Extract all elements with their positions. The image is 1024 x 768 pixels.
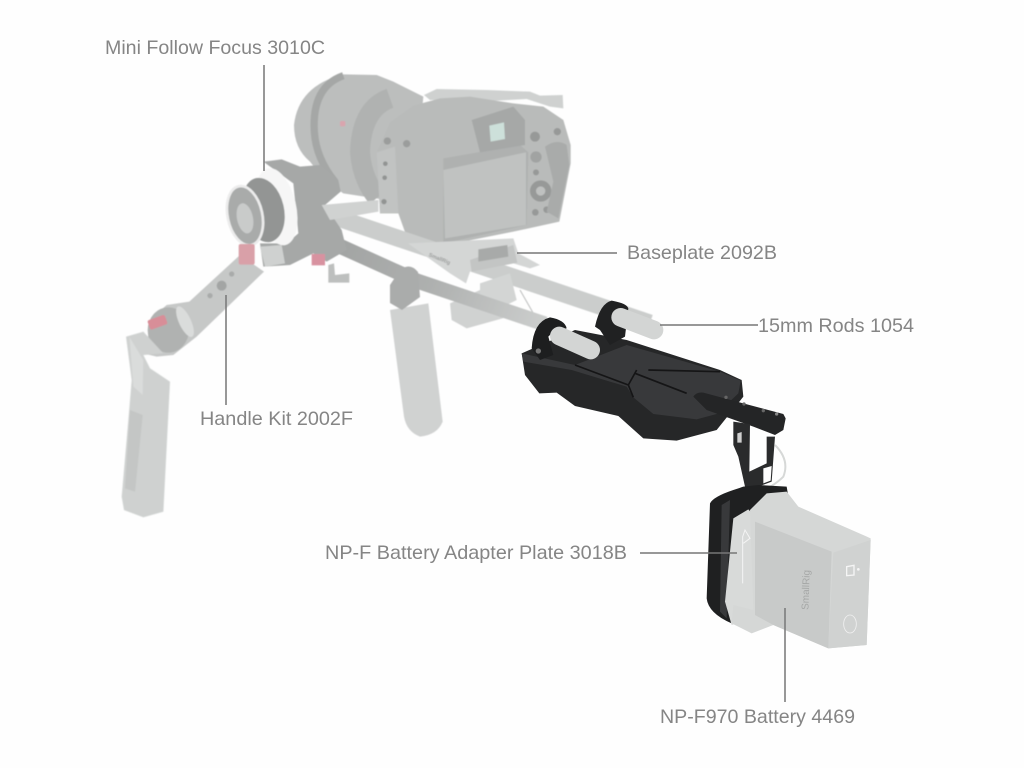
L bracket — [733, 422, 775, 497]
leader line: handle kit — [225, 295, 227, 405]
shoulder pad and battery assembly — [522, 301, 871, 648]
rod ends — [559, 336, 591, 350]
leader line: follow focus — [263, 65, 265, 171]
camera body and cage — [377, 89, 571, 246]
pad top plate — [522, 345, 741, 419]
leader line: adapter plate — [640, 552, 737, 554]
front rod — [335, 244, 545, 324]
leader line: baseplate — [517, 252, 617, 254]
screen — [443, 152, 526, 238]
label: Handle Kit: Handle Kit 2002F — [200, 408, 353, 430]
label: Baseplate: Baseplate 2092B — [627, 242, 777, 264]
leader line: battery — [784, 608, 786, 702]
adapter plate arrow mark — [743, 530, 750, 583]
battery — [732, 492, 871, 648]
label: Mini Follow Focus: Mini Follow Focus 3010C — [105, 37, 325, 59]
baseplate — [408, 238, 540, 283]
top bar — [693, 392, 786, 435]
handle grip — [122, 332, 170, 517]
label: 15mm Rods: 15mm Rods 1054 — [758, 315, 914, 337]
leader line: rods — [660, 324, 758, 326]
battery display — [847, 565, 854, 576]
battery button — [844, 615, 856, 633]
dial — [530, 180, 551, 202]
brand mark: SmallRig — [428, 252, 451, 266]
battery plate black — [707, 485, 788, 623]
label: NP-F Battery Adapter Plate: NP-F Battery Adapter Plate 3018B — [325, 542, 627, 564]
viewfinder — [472, 107, 525, 152]
battery brand: SmallRig — [800, 570, 813, 610]
center grip — [390, 273, 533, 437]
follow focus wheel — [222, 164, 304, 249]
follow focus bracket — [260, 159, 378, 283]
rod clamps — [532, 301, 628, 360]
adapter plate (faded) — [725, 509, 758, 625]
rig: faded camera and accessories — [122, 74, 650, 517]
back rod — [323, 213, 650, 323]
lens — [294, 74, 423, 199]
rod clamp — [390, 266, 420, 310]
label: NP-F970 Battery: NP-F970 Battery 4469 — [660, 706, 855, 728]
handle arm — [143, 244, 264, 357]
cable — [732, 445, 785, 590]
red locks — [239, 244, 255, 265]
shoulder pad base — [522, 330, 743, 441]
